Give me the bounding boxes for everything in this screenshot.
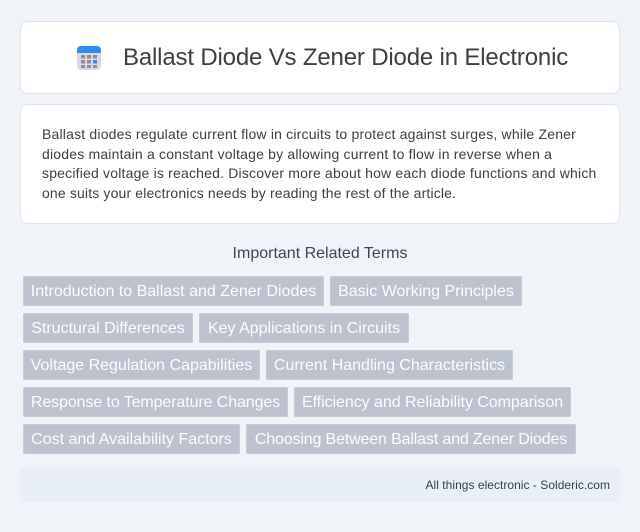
icon: calendar bbox=[77, 46, 101, 70]
tag: Current Handling Characteristics bbox=[274, 357, 505, 374]
tag: Cost and Availability Factors bbox=[31, 431, 232, 448]
tag: Basic Working Principles bbox=[338, 283, 514, 300]
intro text: specified voltage is reached. Discover more about how each diode functions and which bbox=[42, 165, 596, 181]
tag bbox=[266, 350, 513, 380]
intro text: Ballast diodes regulate current flow in circuits to protect against surges, while Zener bbox=[42, 126, 576, 142]
tag bbox=[330, 276, 522, 306]
tag bbox=[246, 424, 576, 454]
footer bar bbox=[20, 468, 620, 502]
intro text: one suits your electronics needs by reading the rest of the article. bbox=[42, 185, 456, 201]
tag: Voltage Regulation Capabilities bbox=[31, 357, 252, 374]
tag: Response to Temperature Changes bbox=[31, 394, 280, 411]
tag: Introduction to Ballast and Zener Diodes bbox=[31, 283, 316, 300]
tag bbox=[23, 387, 288, 417]
tag: Choosing Between Ballast and Zener Diodes bbox=[255, 431, 567, 448]
intro text: diodes maintain a constant voltage by allowing current to flow in reverse when a bbox=[42, 146, 552, 162]
tag bbox=[23, 424, 240, 454]
tag bbox=[23, 276, 324, 306]
tag: Structural Differences bbox=[31, 320, 185, 337]
tag: Efficiency and Reliability Comparison bbox=[302, 394, 563, 411]
header panel bbox=[20, 21, 620, 94]
footer text: All things electronic - Solderic.com bbox=[426, 478, 610, 492]
title: Ballast Diode Vs Zener Diode in Electronic bbox=[123, 44, 568, 71]
intro panel bbox=[20, 104, 620, 224]
tag bbox=[23, 313, 193, 343]
tag list bbox=[23, 276, 576, 454]
intro text bbox=[42, 126, 596, 201]
tag bbox=[23, 350, 260, 380]
section heading: Important Related Terms bbox=[233, 245, 407, 262]
tag bbox=[294, 387, 571, 417]
tag bbox=[199, 313, 409, 343]
tag: Key Applications in Circuits bbox=[208, 320, 400, 337]
